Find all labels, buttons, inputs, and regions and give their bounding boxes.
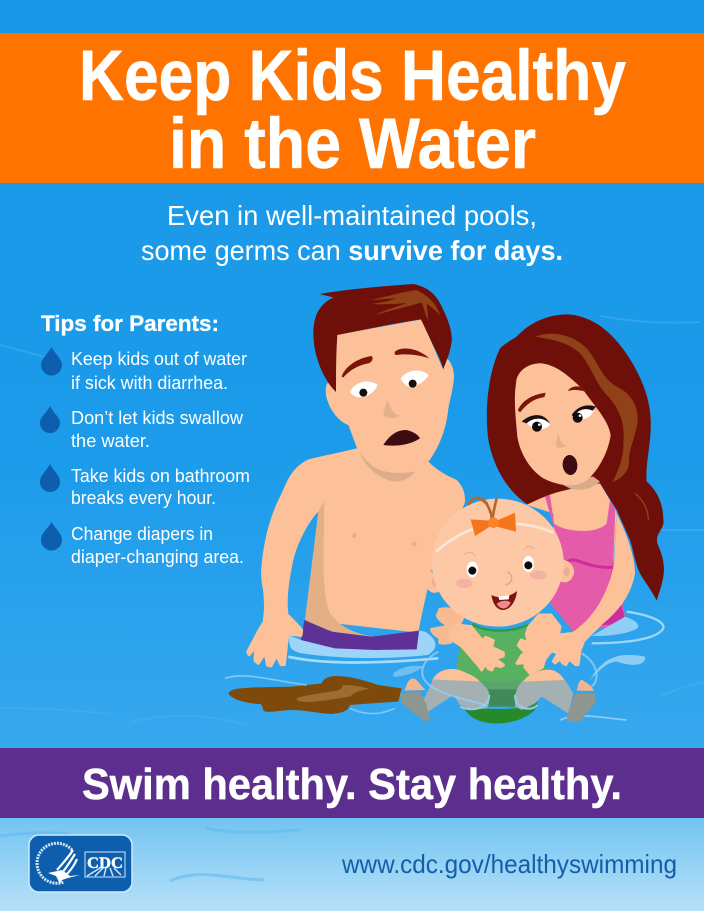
woman's hand bbox=[550, 633, 583, 665]
baby cheeks bbox=[456, 579, 473, 588]
tips heading: Tips for Parents: bbox=[41, 311, 219, 336]
website url: www.cdc.gov/healthyswimming bbox=[341, 849, 677, 879]
man torso and arm bbox=[261, 448, 465, 637]
illustration: family in pool bbox=[225, 284, 664, 724]
title text: in the Water bbox=[169, 105, 536, 184]
tip 4: diaper-changing area. bbox=[71, 546, 244, 567]
tips for parents panel bbox=[40, 311, 250, 567]
tip 1 bbox=[41, 347, 247, 393]
brown diarrhea puddle bbox=[228, 676, 402, 714]
baby body bbox=[400, 615, 597, 724]
man eyebrows bbox=[342, 356, 373, 377]
tip 2: Don’t let kids swallow bbox=[71, 407, 244, 428]
tip 1: if sick with diarrhea. bbox=[71, 372, 228, 393]
man hand bbox=[248, 583, 302, 666]
man swim trunks bbox=[301, 620, 419, 650]
tip 3: Take kids on bathroom bbox=[71, 465, 250, 486]
baby head bbox=[425, 498, 574, 627]
tip 4 bbox=[41, 522, 244, 567]
slogan band bbox=[0, 748, 704, 818]
baby feet bbox=[400, 692, 430, 722]
baby eyebrows bbox=[464, 546, 534, 556]
tip 2: the water. bbox=[71, 430, 150, 451]
baby legs under water bbox=[423, 679, 489, 712]
baby ring ripple bbox=[422, 652, 597, 705]
tip 1: Keep kids out of water bbox=[71, 348, 247, 369]
baby nose bbox=[505, 572, 512, 585]
baby bbox=[400, 498, 597, 724]
man eyes bbox=[350, 382, 378, 397]
title text bbox=[79, 37, 626, 184]
woman hair bbox=[487, 314, 664, 601]
title banner bbox=[0, 33, 704, 184]
man head bbox=[313, 284, 454, 482]
baby face bbox=[432, 499, 564, 627]
baby mouth bbox=[491, 591, 517, 610]
tip 3: breaks every hour. bbox=[71, 487, 216, 508]
baby arms and hands bbox=[450, 625, 503, 670]
CDC HHS logo bbox=[29, 835, 132, 892]
man nose bbox=[384, 400, 400, 418]
woman body and swimsuit bbox=[527, 483, 635, 643]
subtitle: Even in well-maintained pools, bbox=[167, 200, 537, 231]
man's hand behind baby bbox=[430, 607, 465, 645]
woman face bbox=[515, 363, 611, 490]
subtitle: some germs can survive for days. bbox=[141, 235, 563, 266]
CDC HHS logo: CDC bbox=[87, 855, 123, 872]
baby eyes bbox=[467, 561, 478, 577]
pool ripples bbox=[393, 612, 663, 720]
baby thighs bbox=[432, 669, 481, 683]
man trunks, hand and ripples bbox=[225, 583, 438, 714]
man mouth bbox=[383, 430, 420, 446]
footer band bbox=[0, 818, 704, 911]
title text: Keep Kids Healthy bbox=[79, 37, 626, 116]
baby ears bbox=[425, 570, 443, 593]
woman arm bbox=[570, 513, 635, 643]
tip 2 bbox=[40, 406, 244, 451]
tip 3 bbox=[40, 464, 250, 508]
tip 4: Change diapers in bbox=[71, 523, 213, 544]
baby hair curl and bow bbox=[468, 498, 497, 518]
baby swimsuit bbox=[457, 623, 547, 687]
subtitle bbox=[141, 200, 563, 266]
man hair bbox=[313, 284, 452, 392]
woman bbox=[487, 314, 664, 643]
man bbox=[225, 284, 465, 714]
slogan text: Swim healthy. Stay healthy. bbox=[82, 760, 622, 809]
